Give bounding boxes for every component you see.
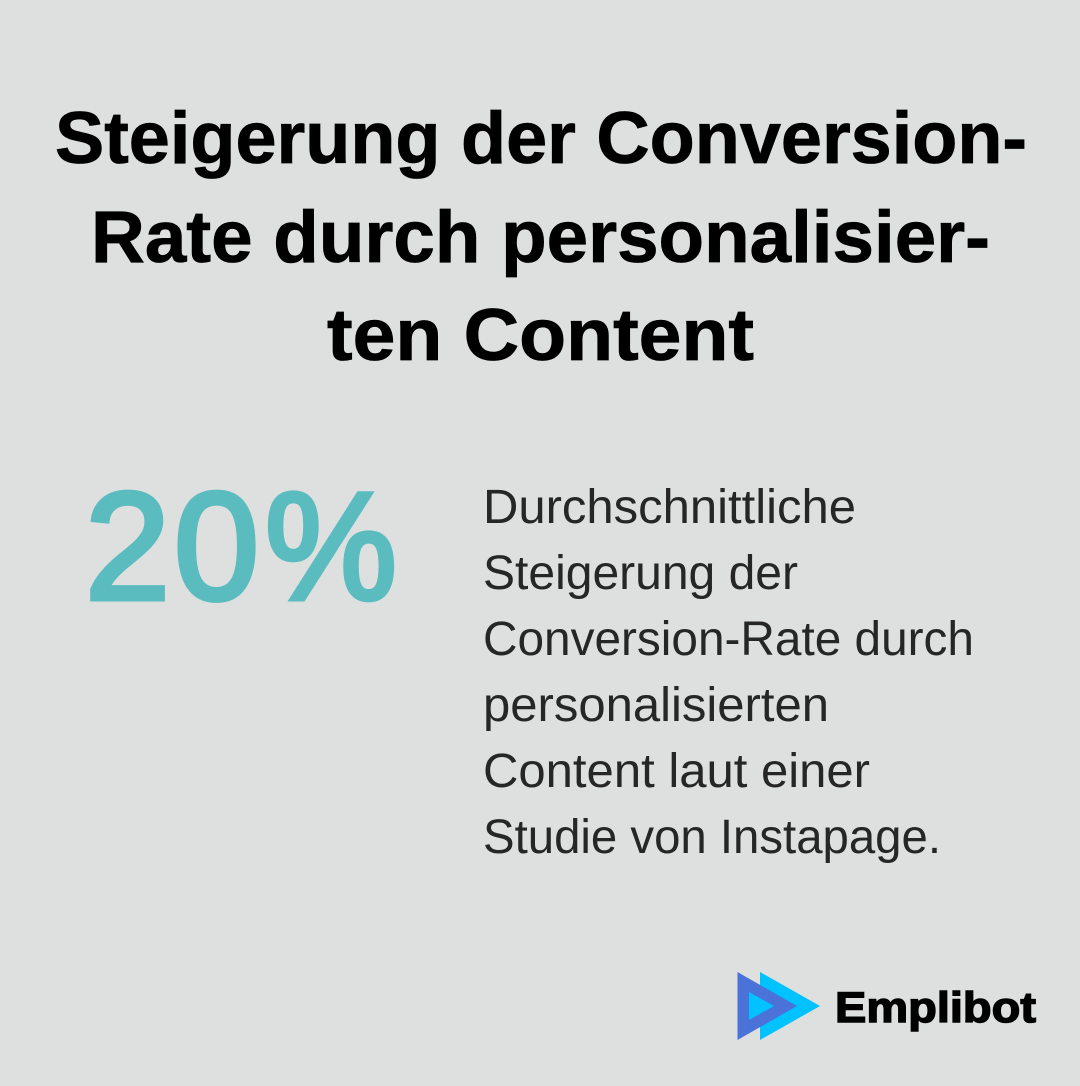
title: Rate durch personalisier- xyxy=(91,197,990,278)
description text: personalisierten xyxy=(483,679,829,732)
description text: Content laut einer xyxy=(483,745,870,798)
icon: rear dark-blue triangle xyxy=(738,972,797,1040)
logo wordmark: Emplibot xyxy=(835,984,1036,1032)
big statistic: 20%: 2 xyxy=(85,461,170,632)
title xyxy=(55,98,1027,376)
big statistic: 20%: 0 xyxy=(174,461,259,632)
description text: Studie von Instapage. xyxy=(483,811,941,864)
logo: Emplibot xyxy=(738,972,1036,1040)
title: ten Content xyxy=(327,295,754,376)
title: Steigerung der Conversion- xyxy=(55,98,1027,179)
description text: Steigerung der xyxy=(483,547,798,600)
icon: front light-blue triangle xyxy=(760,972,820,1040)
icon: inner triangle xyxy=(749,992,774,1020)
description text: Durchschnittliche xyxy=(483,481,856,534)
big statistic: 20%: % xyxy=(265,461,397,632)
description text xyxy=(483,481,974,864)
description text: Conversion-Rate durch xyxy=(483,613,974,666)
